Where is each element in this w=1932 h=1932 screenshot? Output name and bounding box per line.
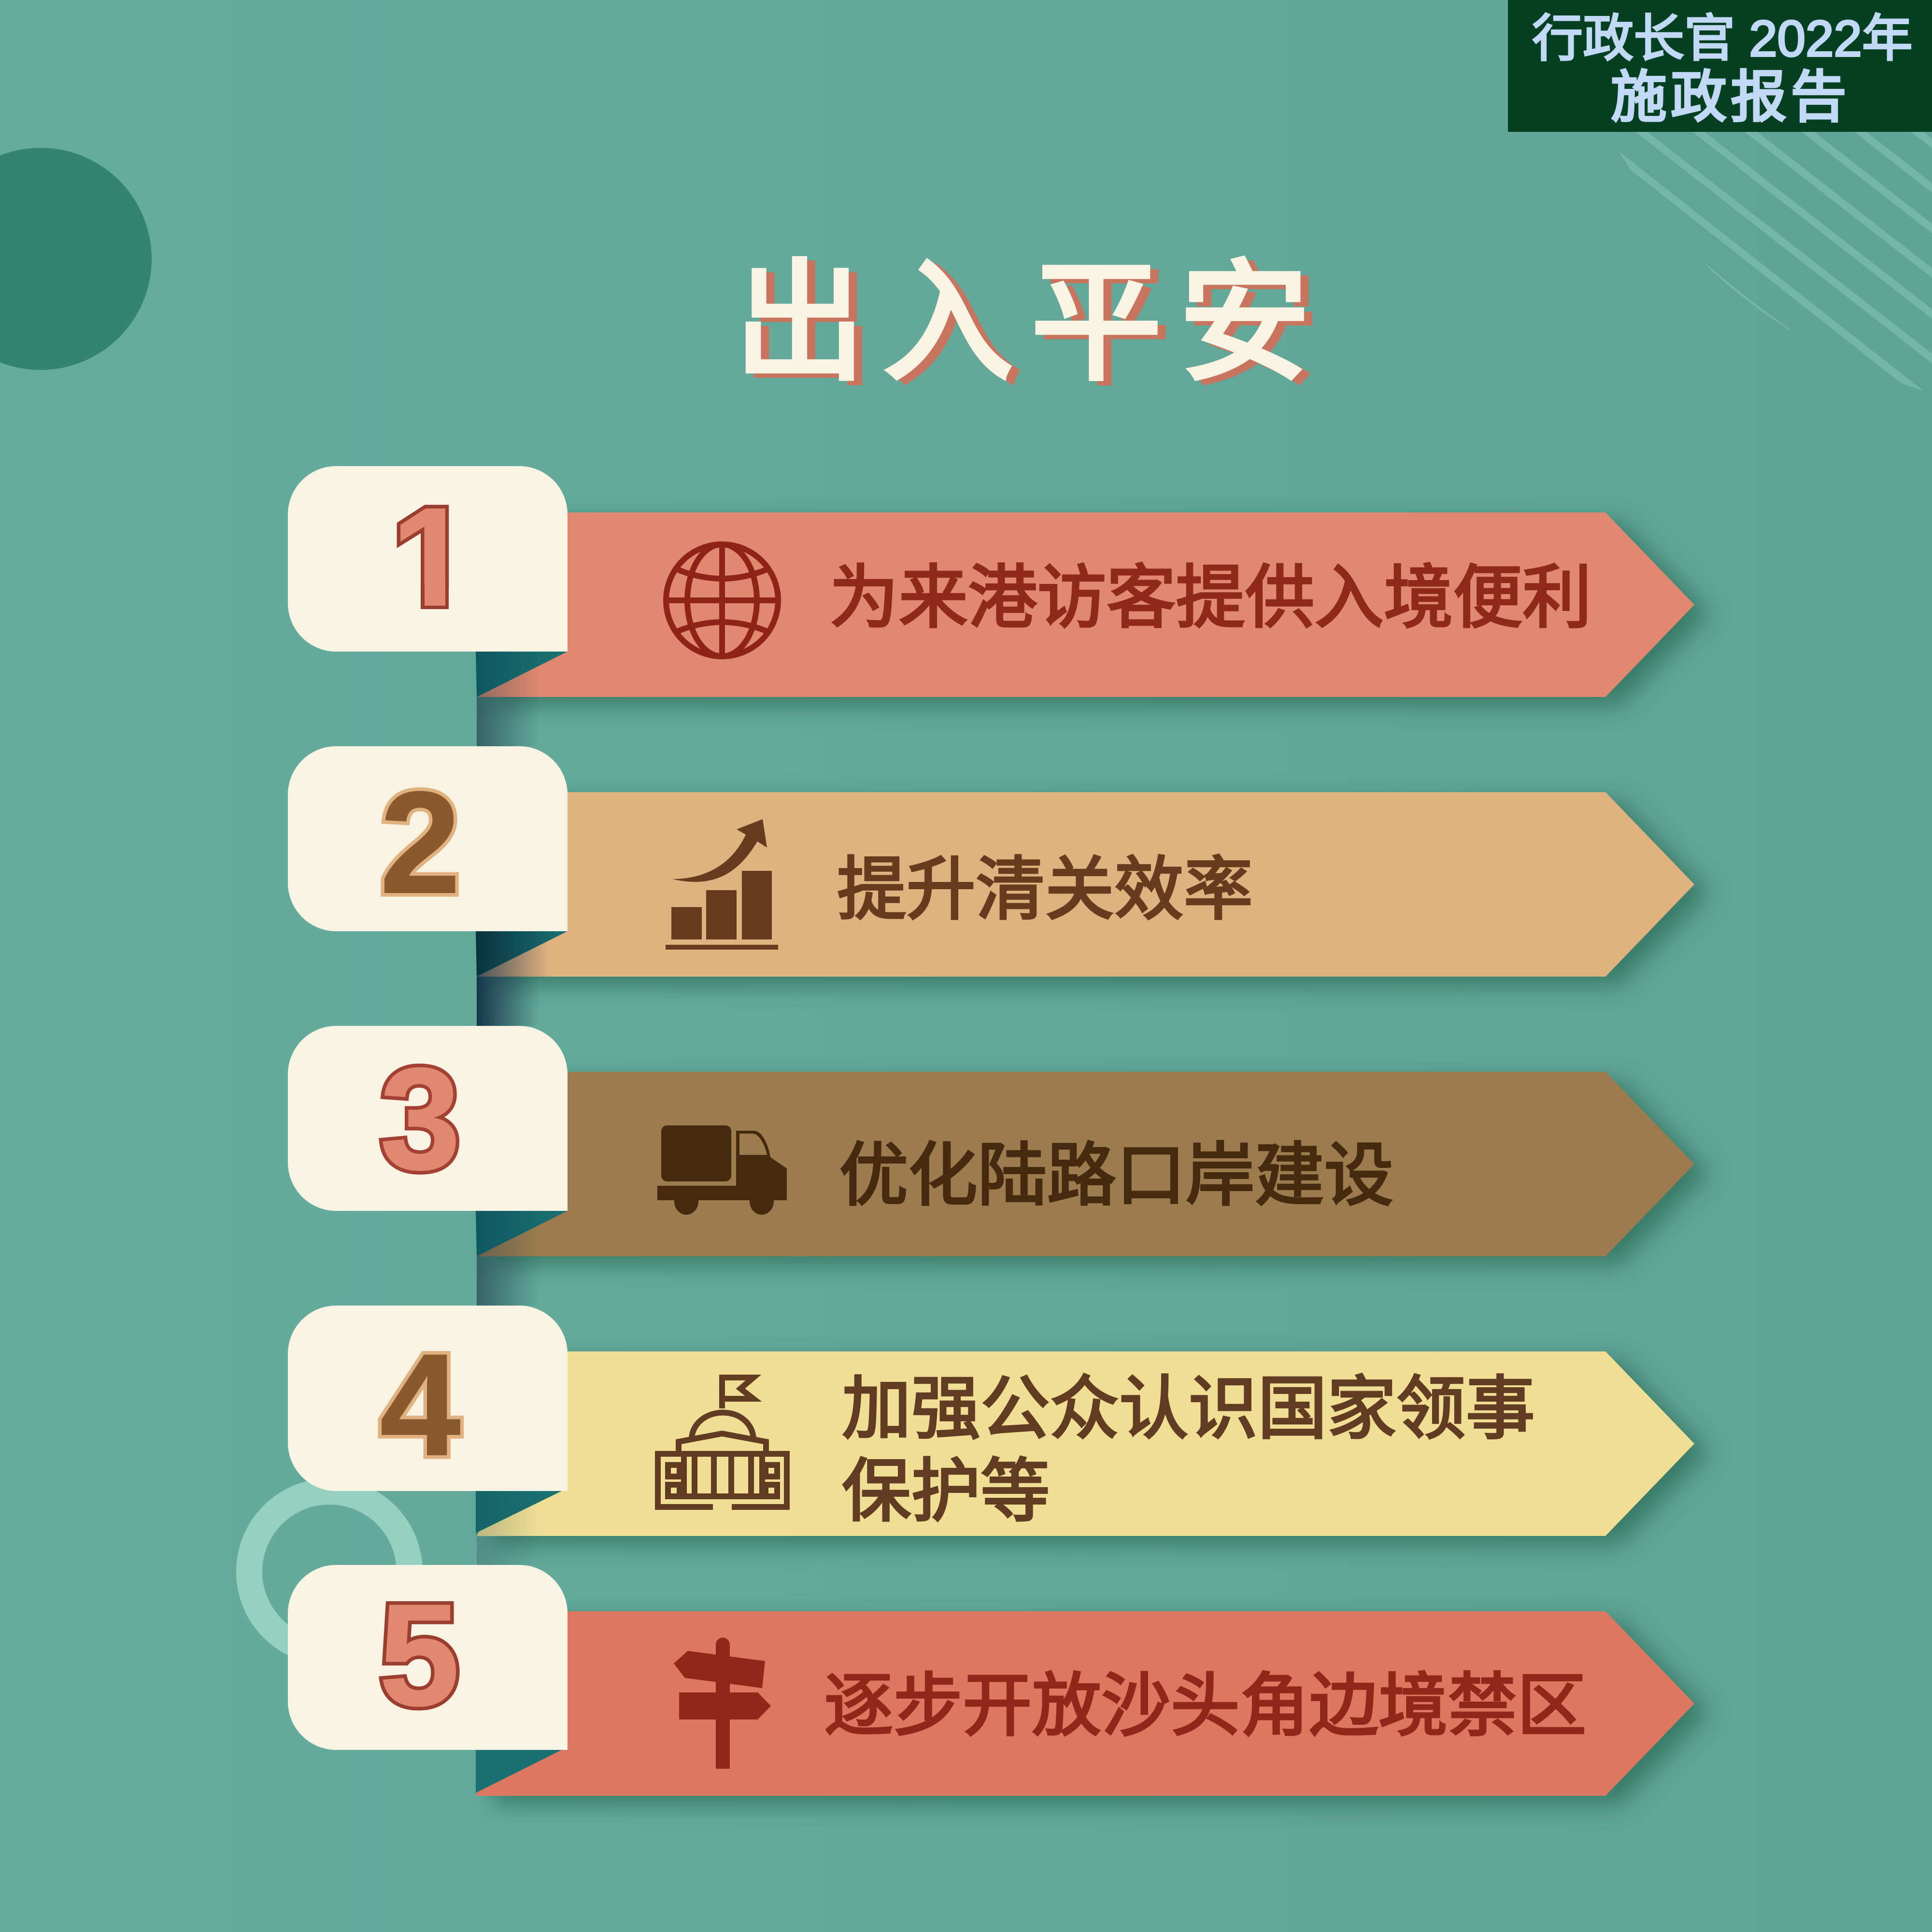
number 3: 3 [380,1037,460,1200]
banner 4 text: 加强公众认识国家领事 [842,1370,1535,1448]
number card 2 [288,746,568,931]
gap shade 4 [477,1536,540,1565]
banner 2 [477,792,1694,977]
number 2: 2 [380,761,460,923]
banner 2 text: 提升清关效率 [837,851,1253,928]
decorative ring [249,1492,410,1652]
banner 3 text: 优化陆路口岸建设 [839,1137,1393,1214]
title: 出入平安 [734,250,1327,397]
decorative diagonal stripes [1619,132,1932,391]
gap shade 3 [477,1256,540,1306]
number 4: 4 [380,1323,461,1486]
banner 4 fold [476,1491,562,1533]
banner 1 text: 为来港访客提供入境便利 [829,559,1592,637]
number 5: 5 [379,1574,459,1736]
banner 1 [477,512,1694,697]
banner 3 shadow [493,1080,1709,1265]
header tag: 施政报告 [1611,66,1850,128]
title: 出入平安 [742,254,1335,401]
icon: truck [657,1125,787,1215]
banner 4 text [842,1370,1535,1530]
gap shade 2 [477,977,540,1026]
number card 1 [288,466,568,652]
banner 2 shadow [493,801,1709,985]
banner 1 edge shade [477,652,568,697]
banner 1 shadow [493,521,1709,706]
gap shade 1 [477,697,540,746]
number 3: 3 [380,1037,460,1200]
banner 5 fold [476,1750,562,1793]
number 1: 1 [391,477,471,639]
number card 5 [288,1565,568,1750]
banner 5 shadow [493,1620,1709,1804]
row 2 [288,746,1709,1026]
number 4: 4 [380,1323,461,1486]
banner 4 [477,1351,1694,1536]
number card 3 [288,1026,568,1211]
icon: bar chart with arrow [666,819,778,950]
banner 3 fold [476,1211,568,1256]
banner 2 edge shade [477,931,568,977]
row 4 [288,1306,1709,1565]
row 3 [288,1026,1709,1306]
icon: signpost [674,1637,771,1769]
number 2: 2 [380,761,460,923]
icon: government building [658,1378,787,1507]
decorative circle top left [0,148,152,370]
number 5: 5 [379,1574,459,1736]
banner 3 edge shade [477,1211,568,1256]
number 1 [397,505,449,609]
number 1: 1 [391,477,471,639]
header tag: 行政长官 2022年 [1532,11,1913,67]
row 5 [288,1565,1709,1804]
header tag [1508,0,1932,132]
row 1 [288,466,1709,746]
number card 4 [288,1306,568,1491]
banner 3 [477,1072,1694,1256]
banner 5 [476,1611,1694,1796]
icon: globe [666,544,778,656]
banner 4 edge shade [476,1491,568,1536]
banner 2 fold [476,931,568,977]
banner 1 fold [476,652,568,697]
banner 5 text: 逐步开放沙头角边境禁区 [824,1667,1587,1745]
banner 4 shadow [493,1360,1709,1545]
banner 4 text: 保护等 [842,1453,1050,1530]
